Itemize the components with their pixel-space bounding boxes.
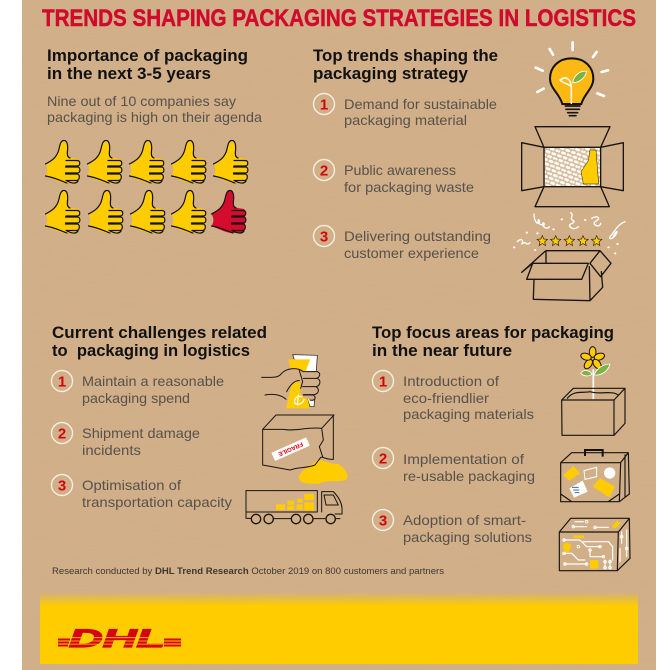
focus area 2: Implementation of bbox=[403, 451, 524, 467]
text: nine out of ten bbox=[47, 93, 262, 125]
heading: top trends: Top trends shaping the bbox=[313, 46, 498, 65]
icon: light bulb with seedling bbox=[536, 42, 608, 116]
heading: current challenges bbox=[52, 323, 267, 360]
trend 3: 3 bbox=[320, 228, 328, 246]
icons: ten thumbs up bbox=[46, 140, 248, 233]
panel: top trends bbox=[313, 42, 625, 301]
heading: importance bbox=[47, 46, 248, 83]
panel: top focus areas bbox=[372, 323, 630, 571]
footnote: Research conducted by DHL Trend Research October 2019 on 800 customers and partners bbox=[52, 566, 444, 577]
trend 1 bbox=[314, 94, 497, 128]
focus area 2: re-usable packaging bbox=[403, 468, 535, 484]
focus area 1: Introduction of bbox=[403, 373, 499, 389]
heading: top focus areas bbox=[372, 323, 614, 360]
trend 2: for packaging waste bbox=[344, 179, 474, 195]
icon: damaged fragile box: FRAGILE bbox=[277, 440, 303, 457]
heading: top focus areas: in the near future bbox=[372, 341, 512, 360]
heading: top focus areas: Top focus areas for packaging bbox=[372, 323, 614, 342]
challenge 2: 2 bbox=[58, 426, 66, 442]
trend 2: Public awareness bbox=[344, 162, 456, 178]
challenge 2: Shipment damage bbox=[82, 425, 200, 441]
icon: five stars and open box bbox=[514, 213, 625, 301]
trend 1: Demand for sustainable bbox=[344, 96, 497, 112]
icon: smart box with circuit bbox=[559, 518, 630, 571]
focus area 3: packaging solutions bbox=[403, 529, 532, 545]
focus area 1: packaging materials bbox=[403, 406, 534, 422]
focus area 3: Adoption of smart- bbox=[403, 512, 526, 528]
icon: flower growing from box bbox=[562, 347, 625, 435]
icon: damaged fragile box bbox=[263, 415, 347, 484]
challenge 1: 1 bbox=[58, 374, 66, 390]
logo: DHL: DHL bbox=[69, 625, 165, 653]
heading: top trends: packaging strategy bbox=[313, 64, 469, 83]
focus area 2: 2 bbox=[379, 450, 387, 468]
logo: DHL bbox=[58, 625, 181, 653]
icon: hand squeezing money bbox=[262, 355, 320, 408]
footer band bbox=[40, 592, 638, 664]
challenge 1 bbox=[52, 370, 224, 406]
focus area 3 bbox=[372, 510, 532, 545]
heading: importance: Importance of packaging bbox=[47, 46, 248, 65]
trend 3: Delivering outstanding bbox=[344, 228, 491, 244]
challenge 1: Maintain a reasonable bbox=[82, 373, 224, 389]
trend 3: customer experience bbox=[344, 245, 479, 261]
text: nine out of ten: packaging is high on their agenda bbox=[47, 109, 262, 125]
heading: importance: in the next 3-5 years bbox=[47, 64, 211, 83]
challenge 3: 3 bbox=[58, 478, 66, 494]
challenge 3: transportation capacity bbox=[82, 494, 232, 510]
panel: current challenges bbox=[52, 323, 347, 524]
focus area 1: 1 bbox=[379, 374, 387, 390]
icon: suitcase with stickers bbox=[561, 450, 629, 502]
heading: current challenges: Current challenges related bbox=[52, 323, 267, 342]
trend 1: packaging material bbox=[344, 112, 467, 128]
challenge 1: packaging spend bbox=[82, 390, 190, 406]
challenge 2 bbox=[52, 422, 200, 458]
challenge 2: incidents bbox=[82, 442, 141, 458]
text: nine out of ten: Nine out of 10 companies say bbox=[47, 93, 236, 109]
trend 2: 2 bbox=[320, 162, 328, 180]
heading: top trends bbox=[313, 46, 498, 83]
focus area 2 bbox=[372, 448, 535, 484]
challenge 3 bbox=[52, 474, 232, 510]
trend 2 bbox=[314, 160, 474, 195]
panel: importance of packaging bbox=[46, 46, 262, 233]
focus area 1 bbox=[372, 370, 534, 422]
trend 1: 1 bbox=[320, 96, 328, 114]
icon: open box with packing peanuts bbox=[522, 127, 623, 207]
icon: delivery truck bbox=[246, 491, 342, 524]
trend 3 bbox=[314, 226, 491, 261]
focus area 1: eco-friendlier bbox=[403, 390, 489, 406]
challenge 3: Optimisation of bbox=[82, 477, 181, 493]
focus area 3: 3 bbox=[379, 512, 387, 530]
heading: current challenges: to packaging in logistics bbox=[52, 341, 250, 360]
